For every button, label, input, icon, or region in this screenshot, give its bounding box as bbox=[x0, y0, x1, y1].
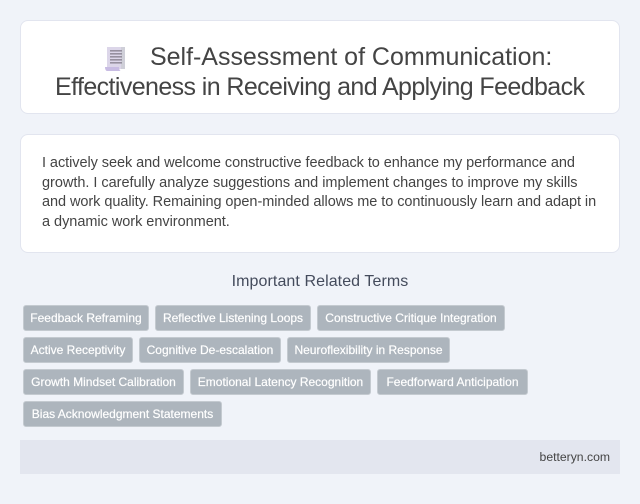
title bbox=[55, 43, 585, 101]
tag bbox=[139, 337, 281, 363]
tag: Reflective Listening Loops bbox=[163, 311, 303, 325]
tag bbox=[23, 305, 149, 331]
panel: title card bbox=[20, 20, 620, 114]
tag bbox=[23, 401, 222, 427]
tag bbox=[377, 369, 528, 395]
tag bbox=[23, 369, 184, 395]
tag bbox=[23, 337, 133, 363]
footer bbox=[20, 440, 620, 474]
text block: self-assessment statement: and work quality. Remaining open-minded allows me to continuously learn and adapt in bbox=[42, 194, 596, 210]
icon: document scroll bbox=[105, 47, 125, 71]
tag: Active Receptivity bbox=[31, 343, 125, 357]
text block: self-assessment statement: I actively seek and welcome constructive feedback to enhance my performance and bbox=[42, 155, 575, 171]
tag bbox=[190, 369, 371, 395]
text block: self-assessment statement: growth. I carefully analyze suggestions and implement changes to improve my skills bbox=[42, 174, 578, 190]
tag group: related terms bbox=[23, 305, 528, 427]
tag: Neuroflexibility in Response bbox=[294, 343, 443, 357]
text block: self-assessment statement: a dynamic work environment. bbox=[42, 214, 230, 230]
title: Self-Assessment of Communication: bbox=[150, 43, 552, 71]
tag: Constructive Critique Integration bbox=[325, 311, 497, 325]
heading: related terms: Important Related Terms bbox=[232, 273, 408, 290]
tag bbox=[317, 305, 505, 331]
panel: description card bbox=[20, 134, 620, 253]
text block: self-assessment statement bbox=[42, 155, 596, 230]
tag: Cognitive De-escalation bbox=[147, 343, 273, 357]
title: Effectiveness in Receiving and Applying Feedback bbox=[55, 73, 584, 101]
tag: Emotional Latency Recognition bbox=[198, 375, 363, 389]
tag: Feedback Reframing bbox=[30, 311, 142, 325]
tag bbox=[155, 305, 311, 331]
tag bbox=[287, 337, 450, 363]
tag: Growth Mindset Calibration bbox=[31, 375, 176, 389]
tag: Bias Acknowledgment Statements bbox=[32, 407, 213, 421]
footer credit: betteryn.com bbox=[540, 450, 610, 464]
tag: Feedforward Anticipation bbox=[386, 375, 519, 389]
